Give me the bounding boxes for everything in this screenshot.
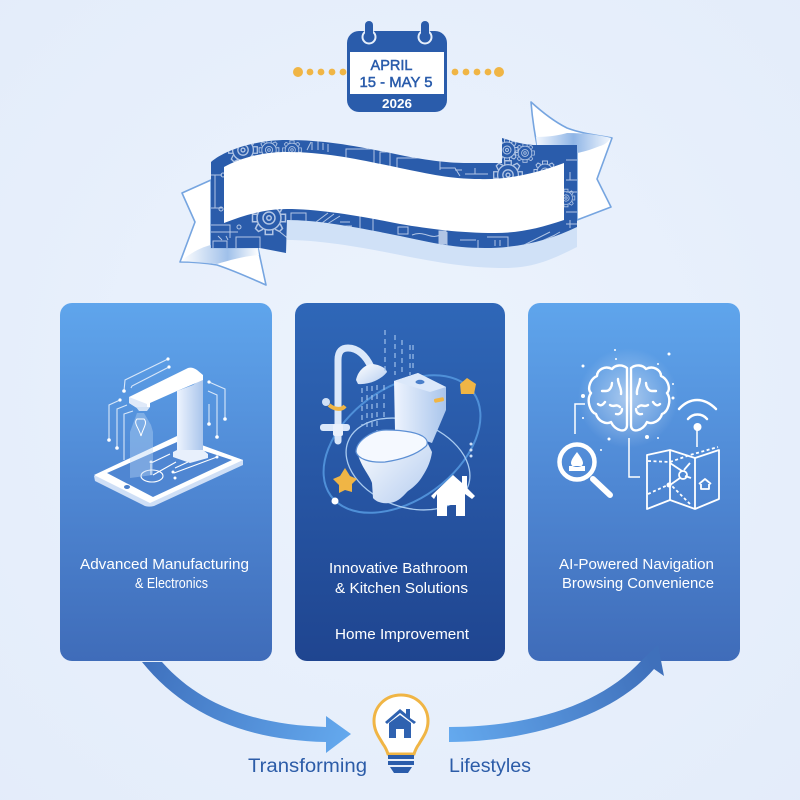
label: AI-Powered Navigation — [559, 557, 714, 573]
faucet post — [177, 378, 203, 452]
icon: shower and toilet — [298, 330, 506, 541]
ribbon blank title area — [224, 152, 564, 233]
circuit pattern — [211, 136, 577, 252]
circuit traces — [109, 359, 225, 460]
wifi — [679, 400, 716, 419]
water streams — [362, 330, 413, 432]
calendar date badge: 2026 — [382, 96, 412, 111]
folding map — [647, 447, 719, 509]
label: Browsing Convenience — [562, 576, 714, 592]
calendar date badge: APRIL — [370, 57, 412, 74]
caption: lifestyles: Lifestyles — [449, 756, 531, 777]
ribbon banner — [180, 102, 612, 285]
calendar date badge — [347, 21, 447, 112]
water bottle — [130, 413, 153, 478]
brain — [589, 365, 669, 430]
connector lines — [575, 404, 697, 477]
label: Innovative Bathroom — [329, 561, 468, 577]
icon: faucet on tablet — [94, 357, 243, 507]
toilet tank — [394, 373, 446, 443]
label: Home Improvement — [335, 627, 469, 643]
panel: advanced manufacturing — [60, 303, 272, 661]
caption: transforming: Transforming — [248, 756, 367, 777]
label — [80, 557, 249, 592]
ribbon shadow — [287, 220, 577, 268]
arrow: out of lightbulb — [449, 645, 664, 742]
label — [329, 561, 469, 643]
icon: gold stars — [333, 378, 476, 493]
label: & Electronics — [135, 576, 208, 592]
toilet seat — [356, 430, 427, 462]
panel: bathroom and kitchen — [295, 303, 506, 661]
tablet — [94, 437, 243, 507]
panel: ai navigation — [528, 303, 740, 661]
orbit rings — [298, 347, 506, 541]
icon: lightbulb with home — [374, 695, 428, 773]
ribbon circuit band — [211, 138, 577, 253]
tablet interface marks — [141, 454, 217, 482]
icon: home — [431, 475, 475, 516]
faucet arm — [129, 368, 203, 408]
shower — [338, 348, 371, 441]
faucet base — [173, 450, 208, 463]
label: Advanced Manufacturing — [80, 557, 249, 573]
magnifier — [560, 444, 610, 495]
calendar date badge: 15 - MAY 5 — [360, 74, 432, 91]
left ribbon tail — [180, 180, 266, 285]
date connector dots — [293, 67, 504, 77]
toilet bowl — [358, 430, 432, 503]
label — [559, 557, 714, 592]
right ribbon tail — [531, 102, 612, 220]
arrow: into lightbulb — [142, 662, 351, 753]
label: & Kitchen Solutions — [335, 581, 468, 597]
icon: brain, search, map, wifi — [560, 348, 719, 509]
